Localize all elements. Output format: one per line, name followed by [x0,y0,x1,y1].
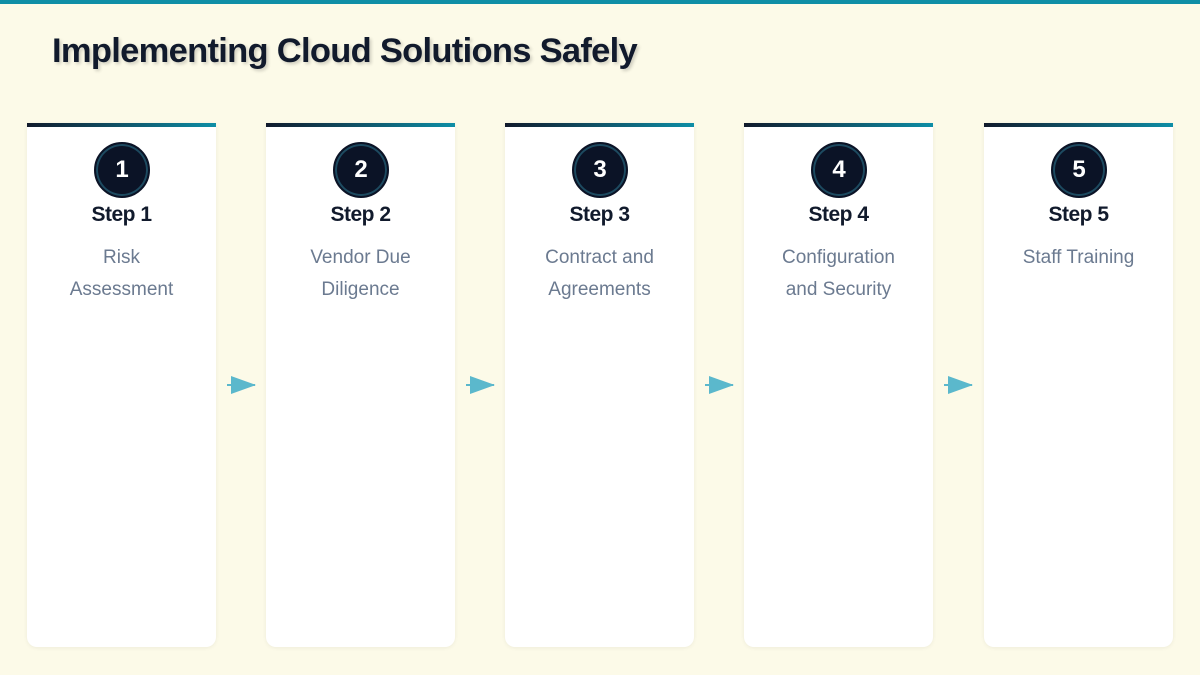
icon: number 4 [811,142,867,198]
step 3 text: Contract and [545,247,654,268]
step 2 text: Diligence [321,279,400,300]
icon: number 1: 1 [115,156,129,183]
step 4 text: Configuration [782,247,895,268]
step 1 text: Assessment [70,279,173,300]
step 1 heading: Step 1 [91,203,152,226]
icon: number 5 [1051,142,1107,198]
panel: step 2 [266,123,455,647]
arrow 3 [705,376,734,394]
icon: number 1 [94,142,150,198]
icon: number 2: 2 [354,156,368,183]
panel: step 1 [27,123,216,647]
step 2 heading: Step 2 [330,203,391,226]
panel: step 5 [984,123,1173,647]
step 4 text: and Security [786,279,891,300]
icon: number 5: 5 [1072,156,1086,183]
step 3 text [545,247,654,300]
step 4 heading: Step 4 [808,203,869,226]
step 4 text [782,247,895,300]
arrow 1 [227,376,256,394]
icon: number 4: 4 [832,156,846,183]
icon: number 3: 3 [593,156,607,183]
step 2 text [310,247,411,300]
arrow 4 [944,376,973,394]
panel: step 3 [505,123,694,647]
step 3 text: Agreements [548,279,651,300]
title: Implementing Cloud Solutions Safely [52,32,637,70]
step 2 text: Vendor Due [310,247,411,268]
step 3 heading: Step 3 [569,203,630,226]
step 5 text: Staff Training [1023,247,1134,268]
arrow 2 [466,376,495,394]
step 1 text [70,247,174,300]
icon: number 2 [333,142,389,198]
icon: number 3 [572,142,628,198]
panel: step 4 [744,123,933,647]
step 1 text: Risk [103,247,140,268]
step 5 heading: Step 5 [1048,203,1109,226]
